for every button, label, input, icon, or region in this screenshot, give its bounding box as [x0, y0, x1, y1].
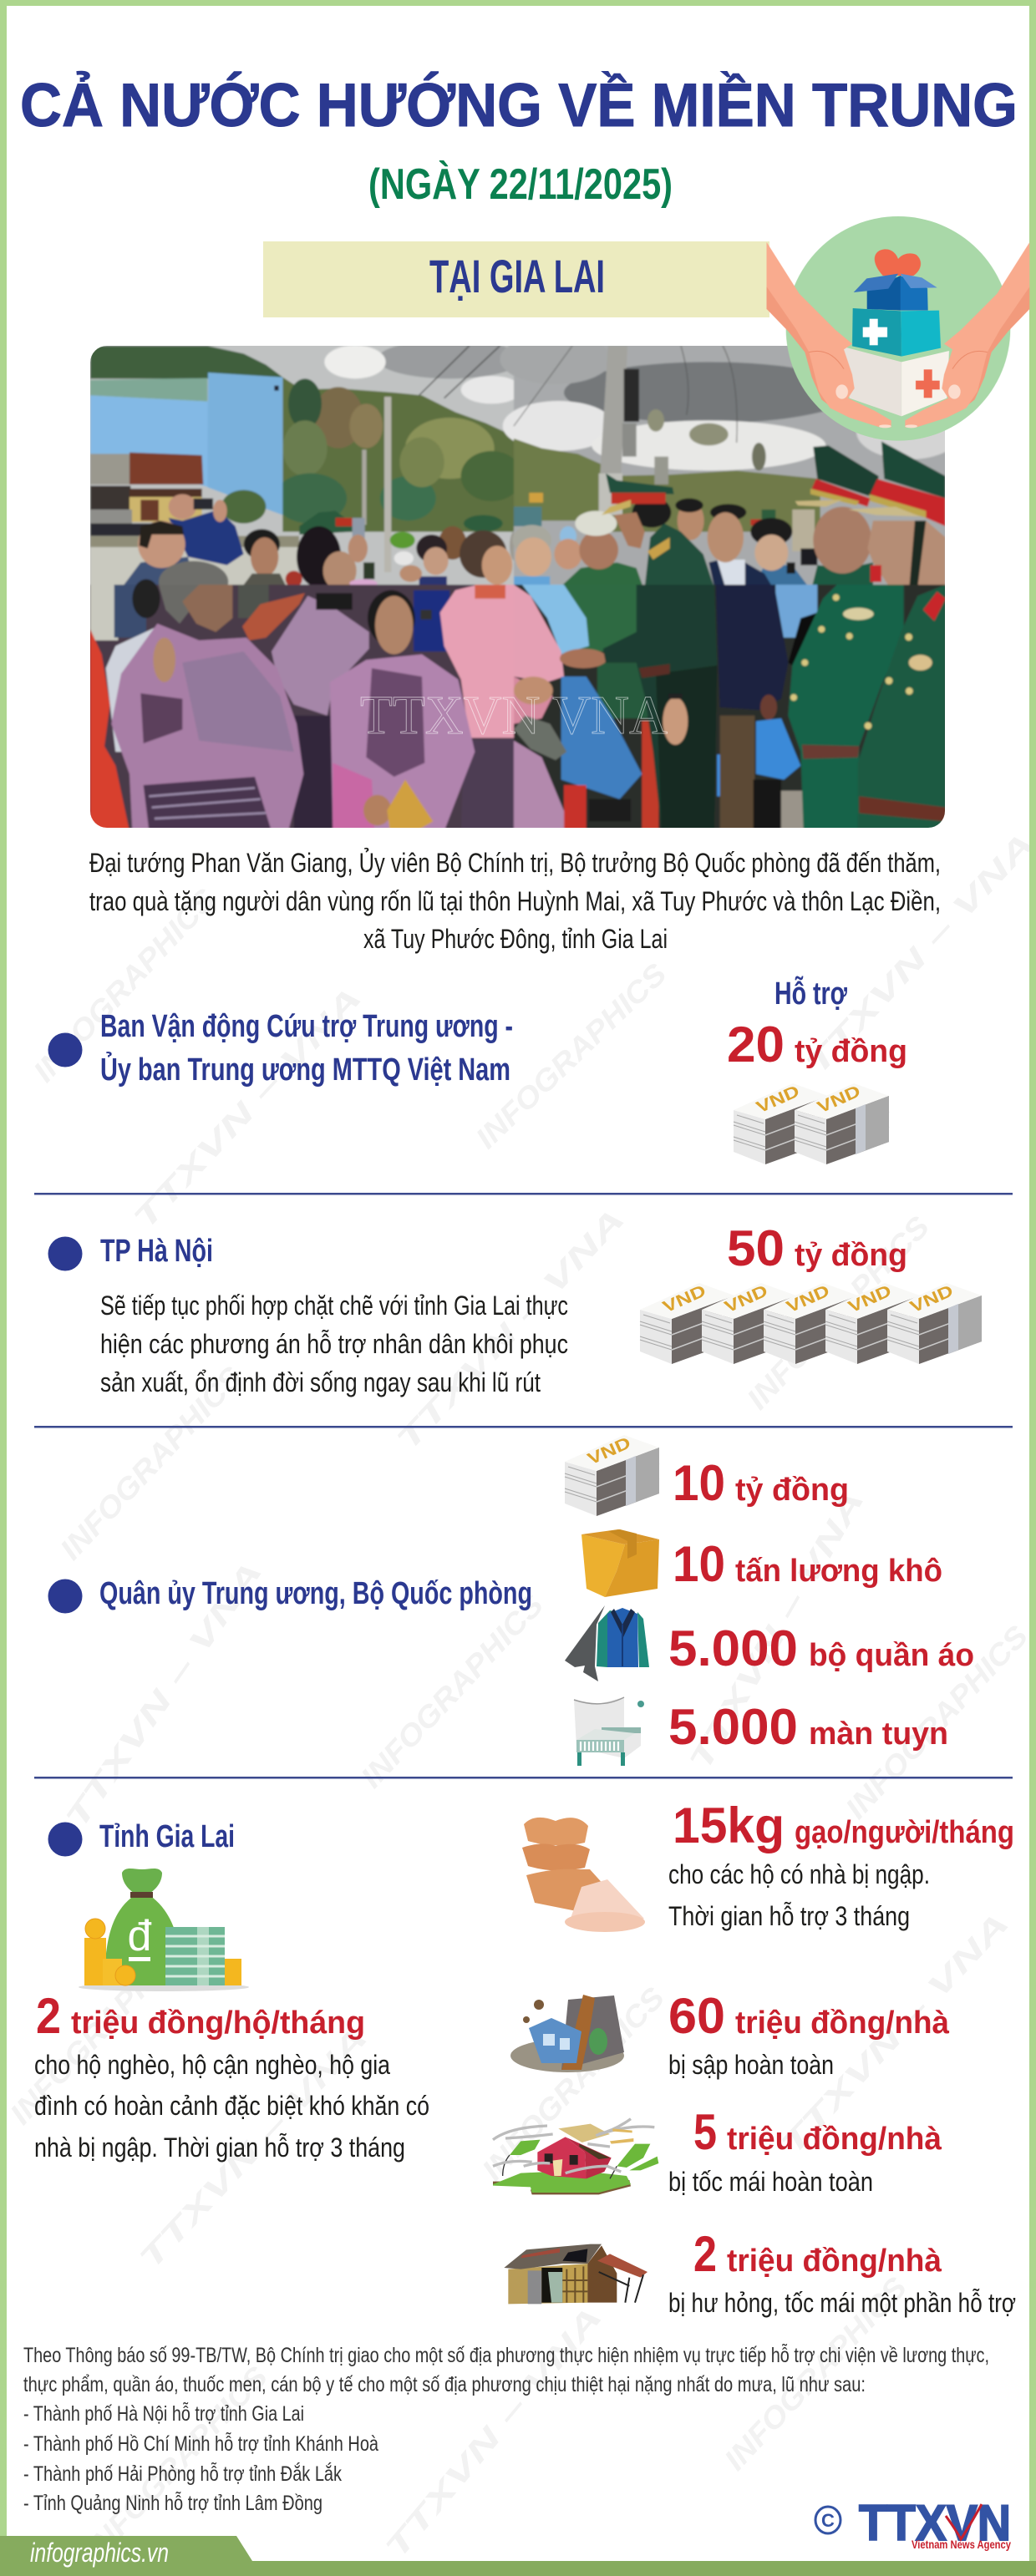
photo: general greeting flood victims: [88, 334, 962, 831]
amount: 60 million per house: 60: [668, 1988, 725, 2044]
body text: sản xuất, ổn định đời sống ngay sau khi lũ rút: [100, 1367, 541, 1397]
icon: money stacks: VND: [815, 1083, 863, 1118]
text: INFOGRAPHICS: [79, 2360, 274, 2566]
icon: money stacks: VND: [846, 1282, 894, 1317]
amount: 2 million per household: triệu đồng/hộ/tháng: [71, 2006, 365, 2041]
panel: Gia Lai province: [34, 1798, 1016, 2318]
icon: money stacks: VND: [754, 1083, 802, 1118]
amount: 10 tons dry food: [673, 1536, 942, 1592]
body text: hiện các phương án hỗ trợ nhân dân khôi phục: [100, 1329, 568, 1359]
footer: site tab: [0, 2536, 1036, 2576]
icon: money stacks: [640, 1282, 982, 1364]
body text: household support: [34, 2050, 429, 2163]
text: INFOGRAPHICS: [475, 1980, 671, 2187]
text: INFOGRAPHICS: [354, 1588, 550, 1794]
amount: 2 million per house: 2: [693, 2226, 717, 2282]
text: TTXVN – VNA: [682, 1484, 871, 1777]
amount: 60 million per house: [668, 1988, 950, 2044]
text: TTXVN – VNA: [132, 2021, 373, 2275]
icon: money stacks: VND: [907, 1282, 956, 1317]
text: INFOGRAPHICS: [718, 2270, 913, 2477]
icon: money stacks: [734, 1083, 889, 1164]
bullet: [48, 1579, 82, 1614]
amount: 5000 clothing sets: bộ quần áo: [809, 1638, 974, 1673]
amount: 10 billion: tỷ đồng: [735, 1473, 849, 1508]
amount: 5000 mosquito nets: màn tuyn: [809, 1716, 948, 1752]
text: TTXVN – VNA: [389, 1202, 631, 1457]
amount: 10 billion: [673, 1455, 849, 1511]
amount: 2 million per household: 2: [36, 1988, 61, 2044]
heading: Quân ủy Trung ương, Bộ Quốc phòng: [99, 1576, 532, 1611]
amount: 2 million per house: triệu đồng/nhà: [727, 2244, 942, 2279]
amount: 10 billion: 10: [673, 1455, 725, 1511]
icon: clothes: [565, 1605, 649, 1681]
heading: [100, 1009, 513, 1088]
text: TTXVN – VNA: [799, 826, 1036, 1081]
text: INFOGRAPHICS: [740, 1209, 936, 1416]
icon: money stacks: VND: [722, 1282, 770, 1317]
amount: 5 million per house: [693, 2104, 942, 2160]
banner: location: TẠI GIA LAI: [429, 250, 605, 302]
panel: Central Military Commission: [48, 1434, 974, 1766]
icon: money stack: VND: [585, 1434, 633, 1469]
icon: cardboard box: [581, 1529, 659, 1597]
icon: hands holding aid boxes: [767, 216, 1029, 441]
banner: location: [263, 241, 769, 317]
body text: rice support: cho các hộ có nhà bị ngập.: [668, 1859, 930, 1889]
text: INFOGRAPHICS: [469, 956, 673, 1155]
heading: Tỉnh Gia Lai: [99, 1819, 235, 1854]
amount: 20 billion: [727, 1017, 907, 1072]
logo: TTXVN: Vietnam News Agency: [912, 2538, 1011, 2551]
body text: [100, 1291, 568, 1397]
bullet: [48, 1823, 82, 1856]
text: TTXVN – VNA: [126, 981, 368, 1235]
logo: TTXVN: TTXVN: [859, 2495, 1011, 2551]
text: INFOGRAPHICS: [839, 1619, 1034, 1825]
icon: damaged hut: [504, 2244, 648, 2304]
body text: household support: cho hộ nghèo, hộ cận nghèo, hộ gia: [34, 2050, 390, 2080]
amount: 50 billion: tỷ đồng: [795, 1238, 907, 1273]
amount: 20 billion: tỷ đồng: [795, 1034, 907, 1069]
amount: 5000 mosquito nets: [668, 1699, 948, 1755]
label: support: Hỗ trợ: [774, 975, 848, 1012]
icon: money bag with coins: đ: [128, 1912, 152, 1960]
body text: rice support: [668, 1859, 930, 1931]
panel: central relief committee: [48, 975, 907, 1164]
footer: site tab: infographics.vn: [30, 2538, 169, 2568]
amount: 5000 clothing sets: 5.000: [668, 1620, 798, 1676]
body text: Sẽ tiếp tục phối hợp chặt chẽ với tỉnh Gia Lai thực: [100, 1291, 568, 1321]
heading: Ban Vận động Cứu trợ Trung ương -: [100, 1009, 513, 1044]
icon: money bag with coins: [79, 1869, 249, 1991]
amount: 15kg rice: 15kg: [673, 1798, 785, 1853]
photo: general greeting flood victims: TTXVN VNA: [360, 685, 668, 746]
body text: household support: nhà bị ngập. Thời gian hỗ trợ 3 tháng: [34, 2132, 405, 2163]
amount: 15kg rice: [673, 1798, 1014, 1853]
icon: mosquito net and bed: [574, 1697, 644, 1766]
amount: 5 million per house: triệu đồng/nhà: [727, 2122, 942, 2157]
text: TTXVN – VNA: [378, 2300, 608, 2565]
text: INFOGRAPHICS: [3, 1924, 199, 2131]
amount: 10 tons dry food: 10: [673, 1536, 725, 1592]
bullet: [48, 1236, 82, 1271]
caption: [89, 848, 941, 954]
text: INFOGRAPHICS: [53, 1360, 249, 1566]
amount: 2 million per household: [36, 1988, 365, 2044]
amount: 5000 clothing sets: [668, 1620, 974, 1676]
footnote: - Thành phố Hải Phòng hỗ trợ tỉnh Đắk Lắk: [23, 2462, 342, 2486]
amount: 50 billion: 50: [727, 1220, 785, 1276]
icon: rice sacks: [522, 1818, 645, 1932]
amount: 10 tons dry food: tấn lương khô: [735, 1554, 942, 1589]
icon: money stack: [565, 1434, 659, 1516]
footnote: - Thành phố Hồ Chí Minh hỗ trợ tỉnh Khánh Hoà: [23, 2431, 378, 2456]
amount: 2 million per house: [693, 2226, 942, 2282]
bullet: [48, 1032, 82, 1067]
subtitle: date: (NGÀY 22/11/2025): [368, 160, 673, 209]
footnote: [23, 2343, 989, 2515]
text: TTXVN – VNA: [58, 1554, 269, 1834]
body text: household support: đình có hoàn cảnh đặc biệt khó khăn có: [34, 2091, 429, 2121]
icon: money stacks: VND: [660, 1282, 708, 1317]
body text: rice support: Thời gian hỗ trợ 3 tháng: [668, 1901, 910, 1931]
heading: TP Hà Nội: [100, 1234, 213, 1269]
panel: Hanoi: [48, 1220, 982, 1397]
text: INFOGRAPHICS: [27, 882, 222, 1088]
amount: 60 million per house: triệu đồng/nhà: [735, 2006, 950, 2041]
amount: 50 billion: [727, 1220, 907, 1276]
logo: TTXVN: C: [821, 2510, 835, 2531]
icon: money stacks: VND: [784, 1282, 832, 1317]
amount: 5 million per house: 5: [693, 2104, 717, 2160]
caption: xã Tuy Phước Đông, tỉnh Gia Lai: [363, 924, 668, 954]
footnote: - Tỉnh Quảng Ninh hỗ trợ tỉnh Lâm Đồng: [23, 2491, 322, 2515]
text: TTXVN – VNA: [774, 1906, 1015, 2161]
body text: collapsed: bị sập hoàn toàn: [668, 2050, 834, 2080]
icon: landslide house: [510, 1995, 624, 2072]
amount: 20 billion: 20: [727, 1017, 785, 1072]
heading: Ủy ban Trung ương MTTQ Việt Nam: [100, 1051, 510, 1088]
icon: storm-hit house: [493, 2119, 658, 2194]
amount: 5000 mosquito nets: 5.000: [668, 1699, 798, 1755]
footnote: - Thành phố Hà Nội hỗ trợ tỉnh Gia Lai: [23, 2401, 304, 2426]
body text: roof blown off: bị tốc mái hoàn toàn: [668, 2167, 873, 2197]
